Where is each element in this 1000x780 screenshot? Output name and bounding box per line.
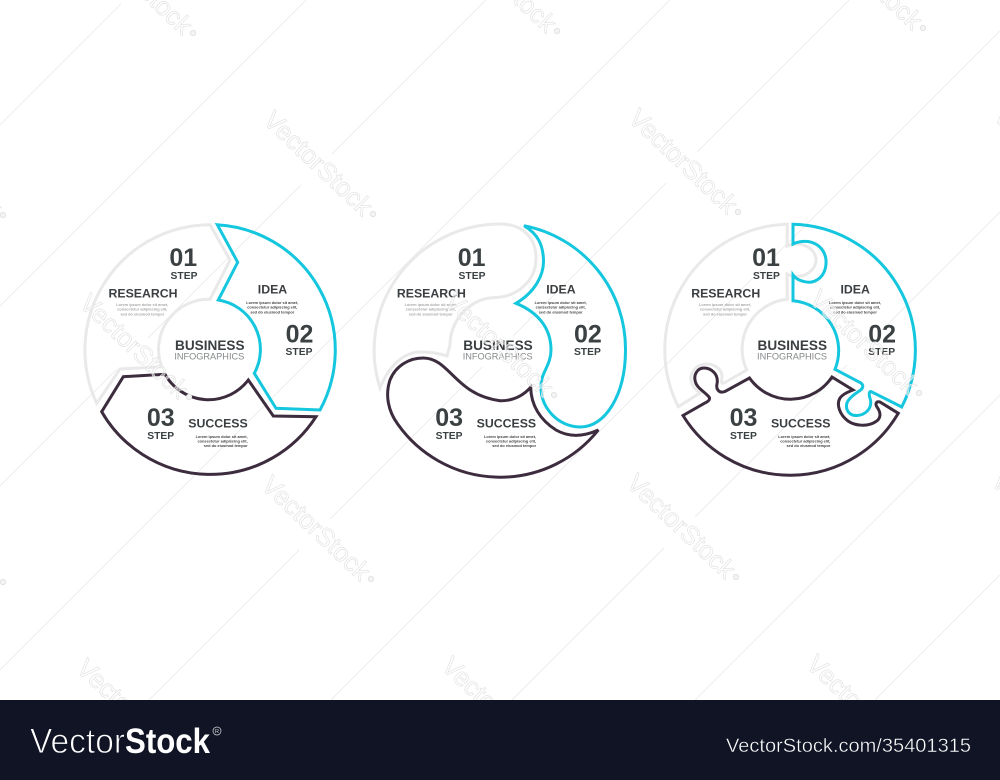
labels: Lorem ipsum dolor sit amet,	[829, 300, 881, 305]
footer logo	[30, 722, 221, 761]
segment 02 outline	[217, 225, 335, 410]
segment 01 outline	[374, 224, 536, 388]
labels: sed do eiusmod tempor	[787, 443, 831, 448]
labels: sed do eiusmod tempor	[204, 443, 248, 448]
labels: sed do eiusmod tempor	[539, 309, 583, 314]
labels: RESEARCH	[108, 286, 178, 300]
labels: Lorem ipsum dolor sit amet,	[196, 434, 248, 439]
labels: SUCCESS	[477, 417, 536, 431]
labels: STEP	[574, 347, 601, 358]
labels: Lorem ipsum dolor sit amet,	[484, 434, 536, 439]
labels: consectetur adipiscing elit,	[247, 305, 297, 310]
labels: consectetur adipiscing elit,	[117, 307, 167, 312]
labels: 03	[147, 404, 175, 432]
footer image id: VectorStock.com/35401315	[726, 736, 971, 757]
labels: 01	[752, 244, 780, 272]
labels	[691, 244, 896, 448]
labels: STEP	[286, 347, 313, 358]
labels: Lorem ipsum dolor sit amet,	[116, 302, 168, 307]
labels: INFOGRAPHICS	[757, 352, 827, 362]
labels: RESEARCH	[397, 286, 466, 300]
watermarks: VectorStock	[621, 468, 742, 585]
labels	[397, 244, 602, 448]
segment 02 outline	[516, 226, 626, 427]
segment 01 outline	[85, 225, 230, 403]
labels: Lorem ipsum dolor sit amet,	[535, 300, 587, 305]
footer logo: Stock	[125, 722, 210, 761]
labels: consectetur adipiscing elit,	[830, 305, 880, 310]
labels: 02	[286, 321, 313, 349]
labels: STEP	[868, 347, 895, 358]
labels: sed do eiusmod tempor	[120, 311, 165, 316]
watermarks: VectorStock	[74, 288, 195, 405]
labels: IDEA	[546, 282, 576, 296]
labels: 01	[458, 244, 486, 272]
labels: STEP	[436, 431, 463, 442]
labels: consectetur adipiscing elit,	[536, 305, 586, 310]
labels: STEP	[753, 271, 780, 282]
diagram: arrow cycle	[85, 225, 335, 474]
labels: Lorem ipsum dolor sit amet,	[405, 302, 457, 307]
labels: consectetur adipiscing elit,	[198, 438, 248, 443]
labels: SUCCESS	[188, 417, 248, 431]
labels: Lorem ipsum dolor sit amet,	[246, 300, 298, 305]
segment 03 outline	[683, 368, 898, 475]
watermarks: VectorStock	[258, 105, 379, 222]
diagram: puzzle cycle	[665, 224, 915, 475]
labels: sed do eiusmod tempor	[250, 309, 295, 314]
labels: STEP	[730, 431, 757, 442]
labels: sed do eiusmod tempor	[492, 443, 537, 448]
labels: 01	[169, 244, 197, 272]
labels: RESEARCH	[691, 286, 760, 300]
watermarks: VectorStock	[801, 649, 922, 766]
segment 01 outline	[665, 224, 816, 407]
watermarks: VectorStock	[256, 470, 377, 587]
labels: Lorem ipsum dolor sit amet,	[778, 434, 830, 439]
segment 03 outline	[102, 374, 316, 474]
labels: IDEA	[841, 282, 870, 296]
labels: IDEA	[258, 282, 287, 296]
footer logo: R	[215, 729, 219, 735]
labels: BUSINESS	[175, 338, 245, 353]
watermarks: VectorStock	[804, 284, 925, 401]
watermarks: VectorStock	[71, 653, 192, 770]
labels: 03	[435, 404, 463, 432]
segment 02 outline	[793, 224, 915, 416]
labels: BUSINESS	[463, 338, 533, 353]
labels: 02	[868, 321, 896, 349]
footer bar	[0, 700, 1000, 780]
labels: 03	[730, 404, 757, 432]
labels: INFOGRAPHICS	[463, 352, 533, 362]
labels: SUCCESS	[771, 417, 830, 431]
labels: STEP	[171, 271, 198, 282]
labels: STEP	[147, 431, 174, 442]
watermarks: VectorStock	[436, 651, 557, 768]
labels	[108, 244, 313, 448]
diagram: organic cycle	[374, 224, 626, 477]
watermarks: VectorStock	[623, 103, 744, 220]
labels: 02	[574, 321, 602, 349]
labels: consectetur adipiscing elit,	[700, 307, 750, 312]
labels: consectetur adipiscing elit,	[406, 307, 456, 312]
footer logo: Vector	[30, 722, 125, 761]
labels: Lorem ipsum dolor sit amet,	[699, 302, 751, 307]
segment 03 outline	[388, 358, 598, 477]
labels: consectetur adipiscing elit,	[780, 438, 830, 443]
labels: sed do eiusmod tempor	[409, 311, 453, 316]
labels: BUSINESS	[758, 338, 827, 353]
labels: STEP	[459, 271, 486, 282]
labels: sed do eiusmod tempor	[833, 309, 877, 314]
labels: sed do eiusmod tempor	[703, 311, 747, 316]
labels: consectetur adipiscing elit,	[486, 438, 536, 443]
labels: INFOGRAPHICS	[174, 352, 244, 362]
watermarks: VectorStock	[439, 286, 560, 403]
